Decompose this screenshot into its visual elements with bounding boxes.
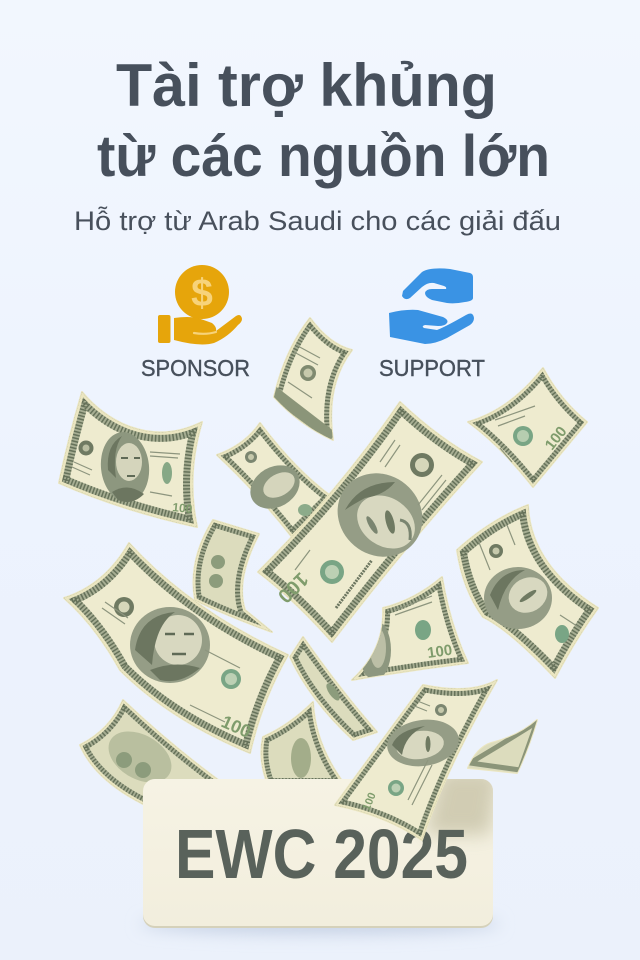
portrait [321, 456, 439, 574]
banknote: upper left with portrait [59, 392, 202, 527]
title: Tài trợ khủng [116, 52, 497, 119]
banknote: upper middle with portrait [217, 423, 332, 537]
box label: EWC 2025 [175, 815, 468, 893]
title: từ các nguồn lớn [97, 124, 550, 189]
banknote: back side, lower middle [261, 702, 345, 785]
banknote: right with portrait [457, 505, 598, 678]
banknote: back side strip [290, 637, 377, 740]
banknote: lower centre right: 100 [426, 642, 453, 662]
box shadow [140, 914, 500, 934]
banknote: large central: 100 [273, 568, 312, 607]
banknote: upper left with portrait: 100 [172, 500, 193, 516]
icon: sponsor hand with dollar coin: $ [191, 272, 213, 315]
banknote: lower centre right [352, 577, 468, 680]
banknote: front, falling into box: 100 [361, 791, 379, 812]
shadow of falling banknote [426, 779, 493, 844]
panel: EWC 2025 box [143, 770, 500, 928]
banknote: upper right: 100 [542, 423, 571, 453]
banknote: back side, middle left [193, 520, 272, 632]
icon: sponsor hand with dollar coin [158, 265, 242, 344]
portrait [384, 715, 462, 771]
title [97, 52, 550, 189]
portrait [97, 430, 153, 504]
subtitle: Hỗ trợ từ Arab Saudi cho các giải đấu [74, 205, 561, 236]
banknote: small right [468, 720, 537, 773]
banknote: large lower left with portrait [64, 543, 288, 753]
banknote: large central [258, 402, 482, 642]
banknote: large lower left with portrait: 100 [218, 711, 254, 742]
banknote: upper right [468, 368, 587, 487]
banknote: top centre [270, 318, 352, 442]
label: sponsor: SPONSOR [141, 355, 250, 381]
icon: support hands [389, 268, 474, 344]
banknote: front, falling into box [335, 680, 497, 840]
banknote: back side, lower left [80, 700, 225, 805]
label: support: SUPPORT [379, 355, 485, 381]
portrait [130, 607, 210, 683]
